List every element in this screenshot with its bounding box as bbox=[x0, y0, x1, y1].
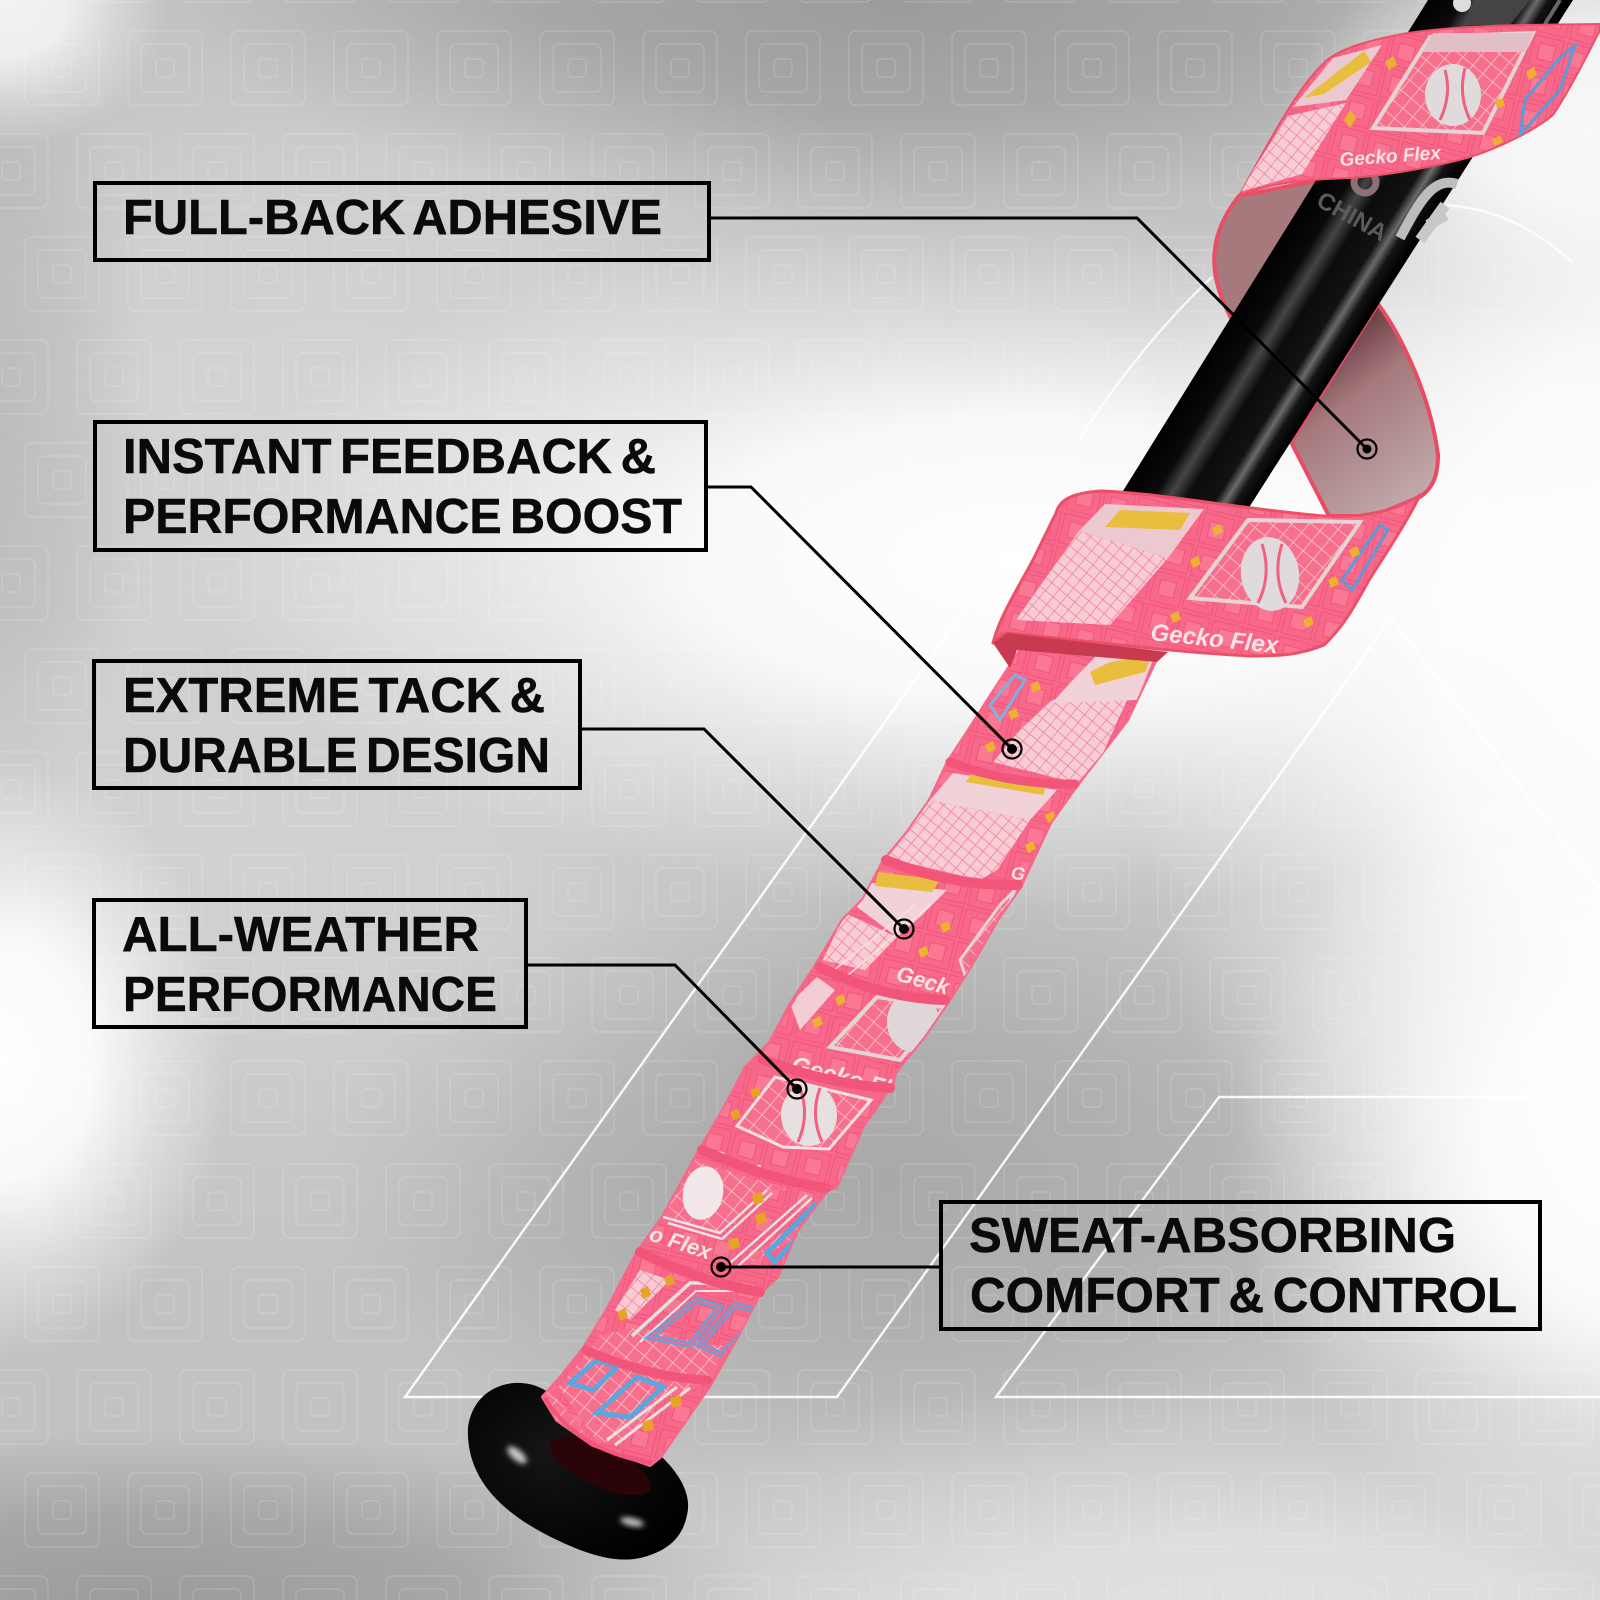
grip wrap 2 bbox=[883, 765, 1075, 887]
lower tape wrap bbox=[993, 491, 1420, 660]
connector and dot: full-back adhesive bbox=[711, 218, 1376, 458]
connector and dot: instant feedback bbox=[708, 487, 1022, 758]
label: instant feedback and performance boost: PERFORMANCE BOOST bbox=[123, 490, 682, 544]
decorative white guide lines bbox=[405, 205, 1600, 1397]
label: all-weather performance: PERFORMANCE bbox=[123, 968, 497, 1022]
upper tape wrap: Gecko Flex bbox=[1339, 143, 1443, 171]
tape back side behind the shaft bbox=[1214, 178, 1438, 516]
grip silhouette bbox=[543, 648, 1158, 1465]
label: instant feedback and performance boost: INSTANT FEEDBACK & bbox=[123, 430, 656, 484]
label: all-weather performance bbox=[94, 900, 526, 1027]
lower tape wrap: Gecko Flex bbox=[1149, 619, 1281, 660]
label: sweat-absorbing comfort and control: SWEAT-ABSORBING bbox=[969, 1209, 1456, 1263]
grip wrap 3 bbox=[815, 870, 1020, 1003]
fold shadow under lower tape bbox=[993, 633, 1168, 668]
connector and dot: all-weather bbox=[528, 965, 806, 1098]
label: sweat-absorbing comfort and control bbox=[941, 1202, 1540, 1329]
black bat shaft: CHINA bbox=[1312, 187, 1392, 247]
grip wrap 2: Ge bbox=[1009, 862, 1037, 887]
grip wrap 1 bbox=[948, 648, 1158, 785]
label: extreme tack and durable design bbox=[94, 661, 580, 788]
grip body wrapped in overlapping tape bbox=[540, 633, 1168, 1465]
label: sweat-absorbing comfort and control: COMFORT & CONTROL bbox=[970, 1269, 1517, 1323]
label: extreme tack and durable design: DURABLE DESIGN bbox=[123, 729, 550, 783]
connector and dot: sweat-absorbing bbox=[712, 1258, 940, 1276]
label: instant feedback and performance boost bbox=[95, 422, 706, 550]
grip wrap 5: Gecko Flex bbox=[704, 1144, 835, 1214]
label: full-back adhesive: FULL-BACK ADHESIVE bbox=[123, 191, 662, 245]
grip wrap 4: Gecko Flex bbox=[789, 1052, 921, 1109]
grip wrap 8 bbox=[540, 1350, 710, 1465]
grip wrap 6 bbox=[637, 1155, 827, 1295]
grip wrap 6: o Flex bbox=[646, 1221, 715, 1265]
connector and dot: extreme tack bbox=[582, 729, 914, 938]
upper tape wrap bbox=[1239, 24, 1600, 196]
grip wrap 4 bbox=[757, 971, 946, 1093]
grip wrap 5 bbox=[697, 1068, 880, 1193]
knob of the bat bbox=[468, 1383, 688, 1560]
grip wrap 3: Geck bbox=[894, 961, 954, 1000]
black bat shaft bbox=[1123, 0, 1573, 509]
label: extreme tack and durable design: EXTREME TACK & bbox=[123, 669, 545, 723]
label: all-weather performance: ALL-WEATHER bbox=[122, 908, 479, 962]
grip wrap 7 bbox=[584, 1256, 763, 1385]
label: full-back adhesive bbox=[95, 183, 709, 260]
